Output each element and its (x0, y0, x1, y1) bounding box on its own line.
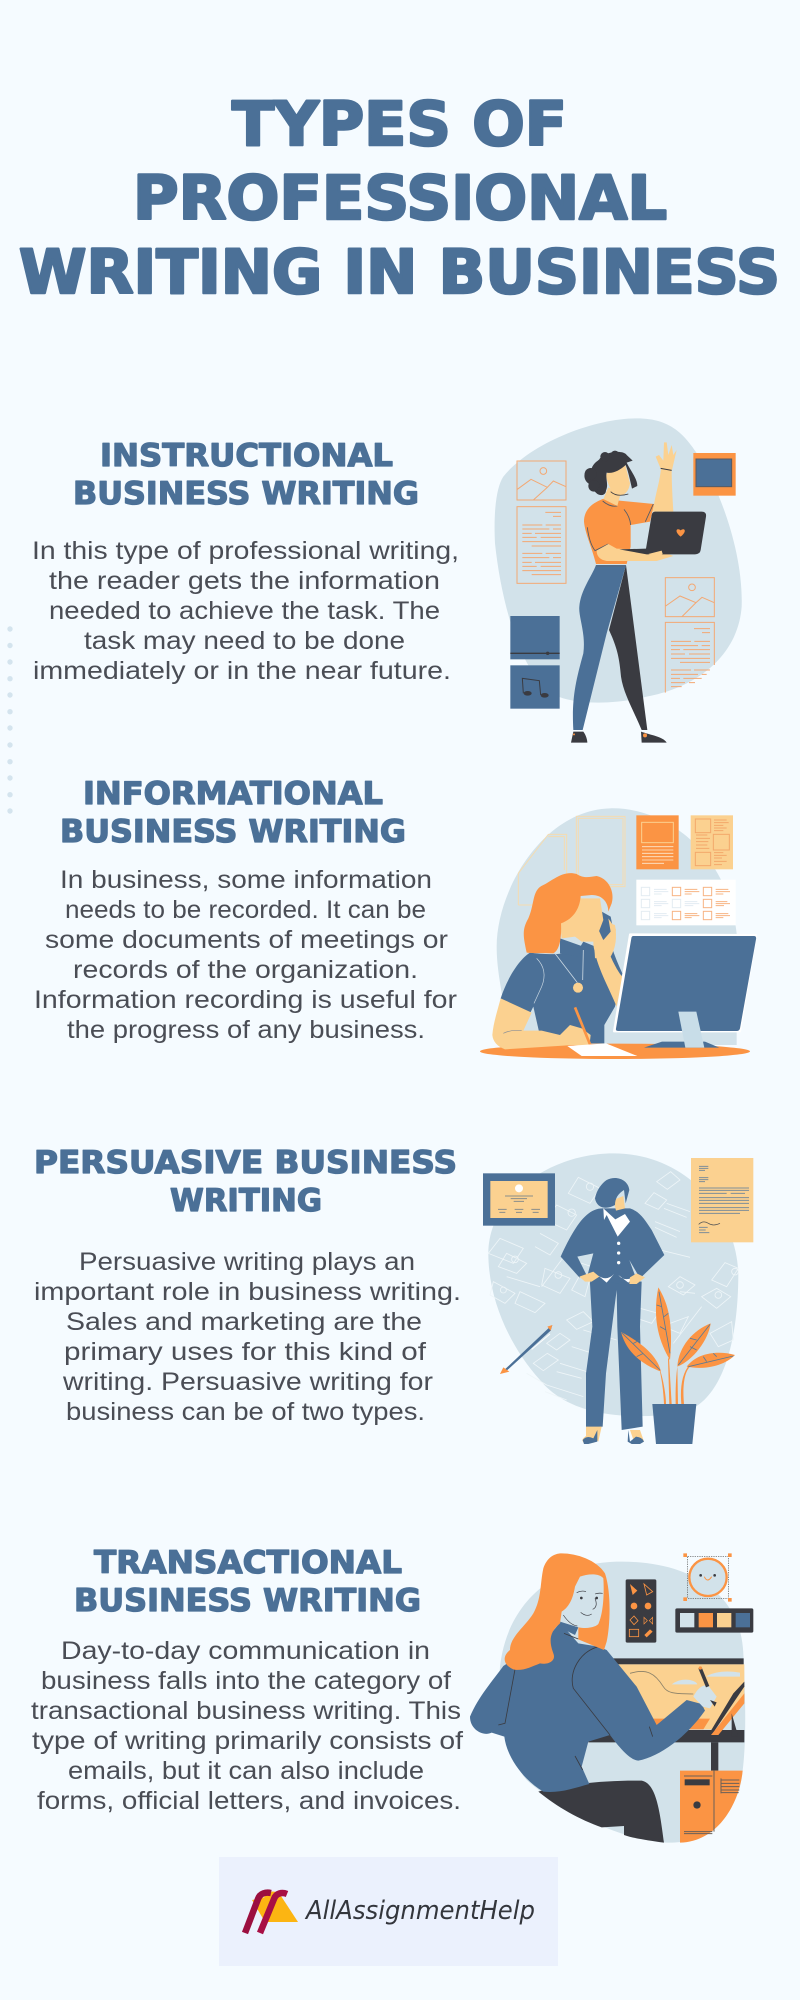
text block: informational (34, 866, 457, 1044)
heading: informational: BUSINESS WRITING (60, 814, 406, 850)
text block: persuasive: Persuasive writing plays an (79, 1248, 415, 1276)
text block: instructional: immediately or in the near future. (33, 657, 451, 685)
heading: transactional (74, 1545, 421, 1619)
panel: persuasive business writing (34, 1145, 753, 1444)
text block: persuasive (34, 1248, 461, 1426)
illustration: woman on the phone at a computer (480, 808, 756, 1059)
heading: instructional: INSTRUCTIONAL (100, 438, 393, 474)
decorative dot column (7, 626, 13, 814)
panel: transactional business writing (31, 1545, 753, 1843)
text block: transactional: business falls into the category of (41, 1667, 451, 1695)
heading: transactional: BUSINESS WRITING (74, 1583, 421, 1619)
heading: persuasive (34, 1145, 457, 1219)
text block: informational: records of the organization. (73, 956, 418, 984)
text block: persuasive: primary uses for this kind of (64, 1338, 426, 1366)
heading: persuasive: WRITING (170, 1183, 322, 1219)
title (19, 89, 780, 308)
text block: persuasive: important role in business writing. (34, 1278, 461, 1306)
illustration: woman in suit with plant (483, 1153, 753, 1444)
text block: informational: needs to be recorded. It can be (65, 896, 426, 924)
text block: transactional: forms, official letters, and invoices. (37, 1787, 461, 1815)
text block: transactional: Day-to-day communication in (61, 1637, 430, 1665)
text block: persuasive: Sales and marketing are the (66, 1308, 422, 1336)
logo text: AllAssignmentHelp (304, 1896, 535, 1926)
heading: transactional: TRANSACTIONAL (94, 1545, 402, 1581)
heading: informational (60, 776, 406, 850)
text block: instructional: needed to achieve the task. The (49, 597, 440, 625)
text block: transactional (31, 1637, 463, 1815)
panel: instructional business writing (32, 418, 742, 743)
icon: logo mark (245, 1892, 298, 1933)
text block: instructional: task may need to be done (84, 627, 405, 655)
illustration: woman with laptop (495, 418, 742, 743)
text block: transactional: transactional business writing. This (31, 1697, 461, 1725)
text block: informational: some documents of meetings or (45, 926, 448, 954)
text block: instructional: the reader gets the information (49, 567, 440, 595)
heading: instructional: BUSINESS WRITING (73, 476, 419, 512)
text block: persuasive: writing. Persuasive writing for (62, 1368, 433, 1396)
text block: informational: In business, some information (60, 866, 432, 894)
text block: instructional: In this type of professional writing, (32, 537, 459, 565)
heading: instructional (73, 438, 419, 512)
heading: persuasive: PERSUASIVE BUSINESS (34, 1145, 457, 1181)
text block: transactional: emails, but it can also include (68, 1757, 424, 1785)
text block: transactional: type of writing primarily consists of (32, 1727, 463, 1755)
title: WRITING IN BUSINESS (19, 237, 780, 308)
panel: informational business writing (34, 776, 756, 1059)
title: PROFESSIONAL (133, 163, 667, 234)
title: TYPES OF (232, 89, 567, 160)
logo: AllAssignmentHelp (219, 1857, 558, 1966)
text block: instructional (32, 537, 459, 685)
heading: informational: INFORMATIONAL (83, 776, 383, 812)
illustration: woman drawing at a desk (470, 1553, 753, 1843)
text block: informational: Information recording is useful for (34, 986, 457, 1014)
text block: persuasive: business can be of two types. (66, 1398, 425, 1426)
text block: informational: the progress of any business. (67, 1016, 425, 1044)
